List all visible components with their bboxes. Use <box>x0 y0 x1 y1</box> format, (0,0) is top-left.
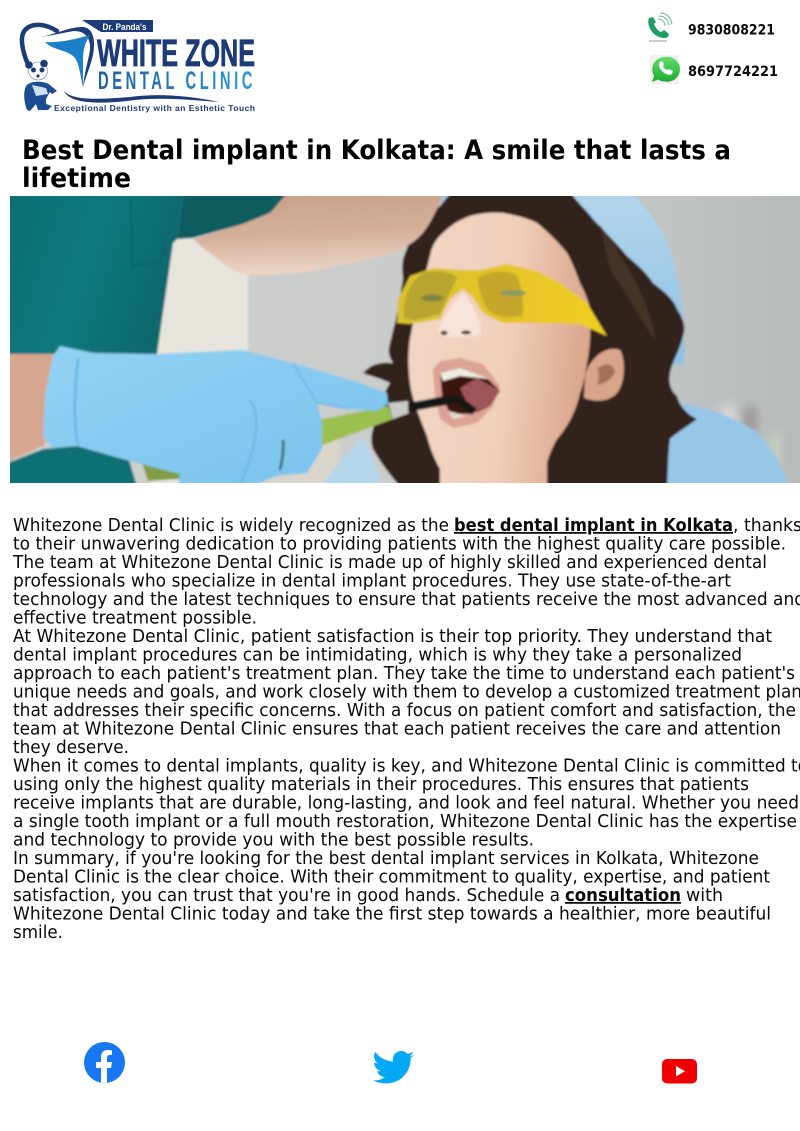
paragraph 4: smile. <box>13 923 63 943</box>
paragraph 4: consultation <box>565 886 681 906</box>
handpiece upper <box>318 406 393 446</box>
paragraph 1: The team at Whitezone Dental Clinic is made up of highly skilled and experienced dental <box>12 553 767 573</box>
icon: YouTube <box>662 1059 697 1084</box>
dental chair lower left <box>322 436 383 483</box>
paragraph 2 <box>13 627 800 758</box>
paragraph 1: to their unwavering dedication to providing patients with the highest quality care possible. <box>13 534 786 554</box>
phone number 1: 9830808221 <box>688 22 775 38</box>
photo: dentist treating a girl <box>0 186 800 493</box>
ear <box>584 349 624 401</box>
dentist wrist <box>10 352 54 462</box>
paragraph 2: At Whitezone Dental Clinic, patient satisfaction is their top priority. They understand that <box>13 627 772 647</box>
scrub sleeve <box>174 196 286 240</box>
paragraph 1: best dental implant in Kolkata <box>454 516 733 536</box>
paragraph 1: effective treatment possible. <box>13 608 257 628</box>
paragraph 4: In summary, if you're looking for the best dental implant services in Kolkata, Whitezone <box>13 849 759 869</box>
nose <box>438 293 481 337</box>
tongue <box>460 378 500 413</box>
paragraph 2: they deserve. <box>13 738 129 758</box>
paragraph 2: approach to each patient's treatment plan. They take the time to understand each patient's <box>13 664 795 684</box>
paragraph 4: Dental Clinic is the clear choice. With their commitment to quality, expertise, and patient <box>13 868 770 888</box>
logo wordmark: WHITE ZONE: WHITE ZONE <box>97 33 255 75</box>
logo: White Zone Dental Clinic <box>22 20 256 113</box>
scrub pocket <box>130 196 142 266</box>
title <box>22 135 731 194</box>
logo icon: panda <box>24 60 57 111</box>
paragraph 1: Whitezone Dental Clinic is widely recognized as the <box>13 516 449 536</box>
paragraph 4: with <box>686 886 723 906</box>
scrub lower <box>10 444 138 483</box>
paragraph 2: team at Whitezone Dental Clinic ensures that each patient receives the care and attention <box>13 720 781 740</box>
paragraph 3: using only the highest quality materials in their procedures. This ensures that patients <box>13 775 749 795</box>
paragraph 3: and technology to provide you with the best possible results. <box>13 830 534 850</box>
mouth <box>440 368 500 414</box>
icon: phone <box>648 13 672 42</box>
dental chair headrest <box>572 196 685 366</box>
paragraph 1 <box>12 516 800 628</box>
phone number 2: 8697724221 <box>688 64 778 80</box>
icon: WhatsApp <box>650 55 680 84</box>
body text <box>12 516 800 943</box>
dental chair lower right <box>666 403 788 483</box>
paragraph 1: professionals who specialize in dental implant procedures. They use state-of-the-art <box>13 572 731 592</box>
paragraph 4 <box>13 849 771 943</box>
paragraph 2: dental implant procedures can be intimidating, which is why they take a personalized <box>13 646 742 666</box>
hair <box>363 190 697 490</box>
paragraph 4: satisfaction, you can trust that you're in good hands. Schedule a <box>13 886 560 906</box>
photo background wall <box>0 186 800 493</box>
logo ribbon: Dr. Panda's <box>82 20 153 32</box>
paragraph 4: Whitezone Dental Clinic today and take the first step towards a healthier, more beautiful <box>13 904 771 924</box>
icon: Twitter <box>373 1051 414 1084</box>
dentist arm <box>193 190 445 275</box>
teeth <box>440 368 490 381</box>
logo tagline: Exceptional Dentistry with an Esthetic Touch <box>54 103 255 113</box>
lips <box>433 358 500 428</box>
logo ribbon: Dr. Panda's: Dr. Panda's <box>102 22 146 32</box>
blurred clinic objects <box>720 404 781 470</box>
logo wordmark: DENTAL CLINIC: DENTAL CLINIC <box>98 67 256 95</box>
face <box>408 213 590 490</box>
handpiece lower <box>142 464 182 482</box>
glasses <box>397 264 607 336</box>
curing light collar <box>388 401 409 419</box>
logo icon: tooth <box>22 25 219 103</box>
title: Best Dental implant in Kolkata: A smile that lasts a <box>22 135 731 166</box>
glove <box>43 346 388 490</box>
paragraph 2: that addresses their specific concerns. With a focus on patient comfort and satisfaction, the <box>13 701 796 721</box>
curing light tip <box>408 395 477 415</box>
scrub top <box>0 186 185 354</box>
title: lifetime <box>22 163 131 194</box>
paragraph 3 <box>13 756 800 850</box>
paragraph 3: a single tooth implant or a full mouth restoration, Whitezone Dental Clinic has the expertise <box>13 812 797 832</box>
icon: Facebook <box>84 1042 125 1084</box>
